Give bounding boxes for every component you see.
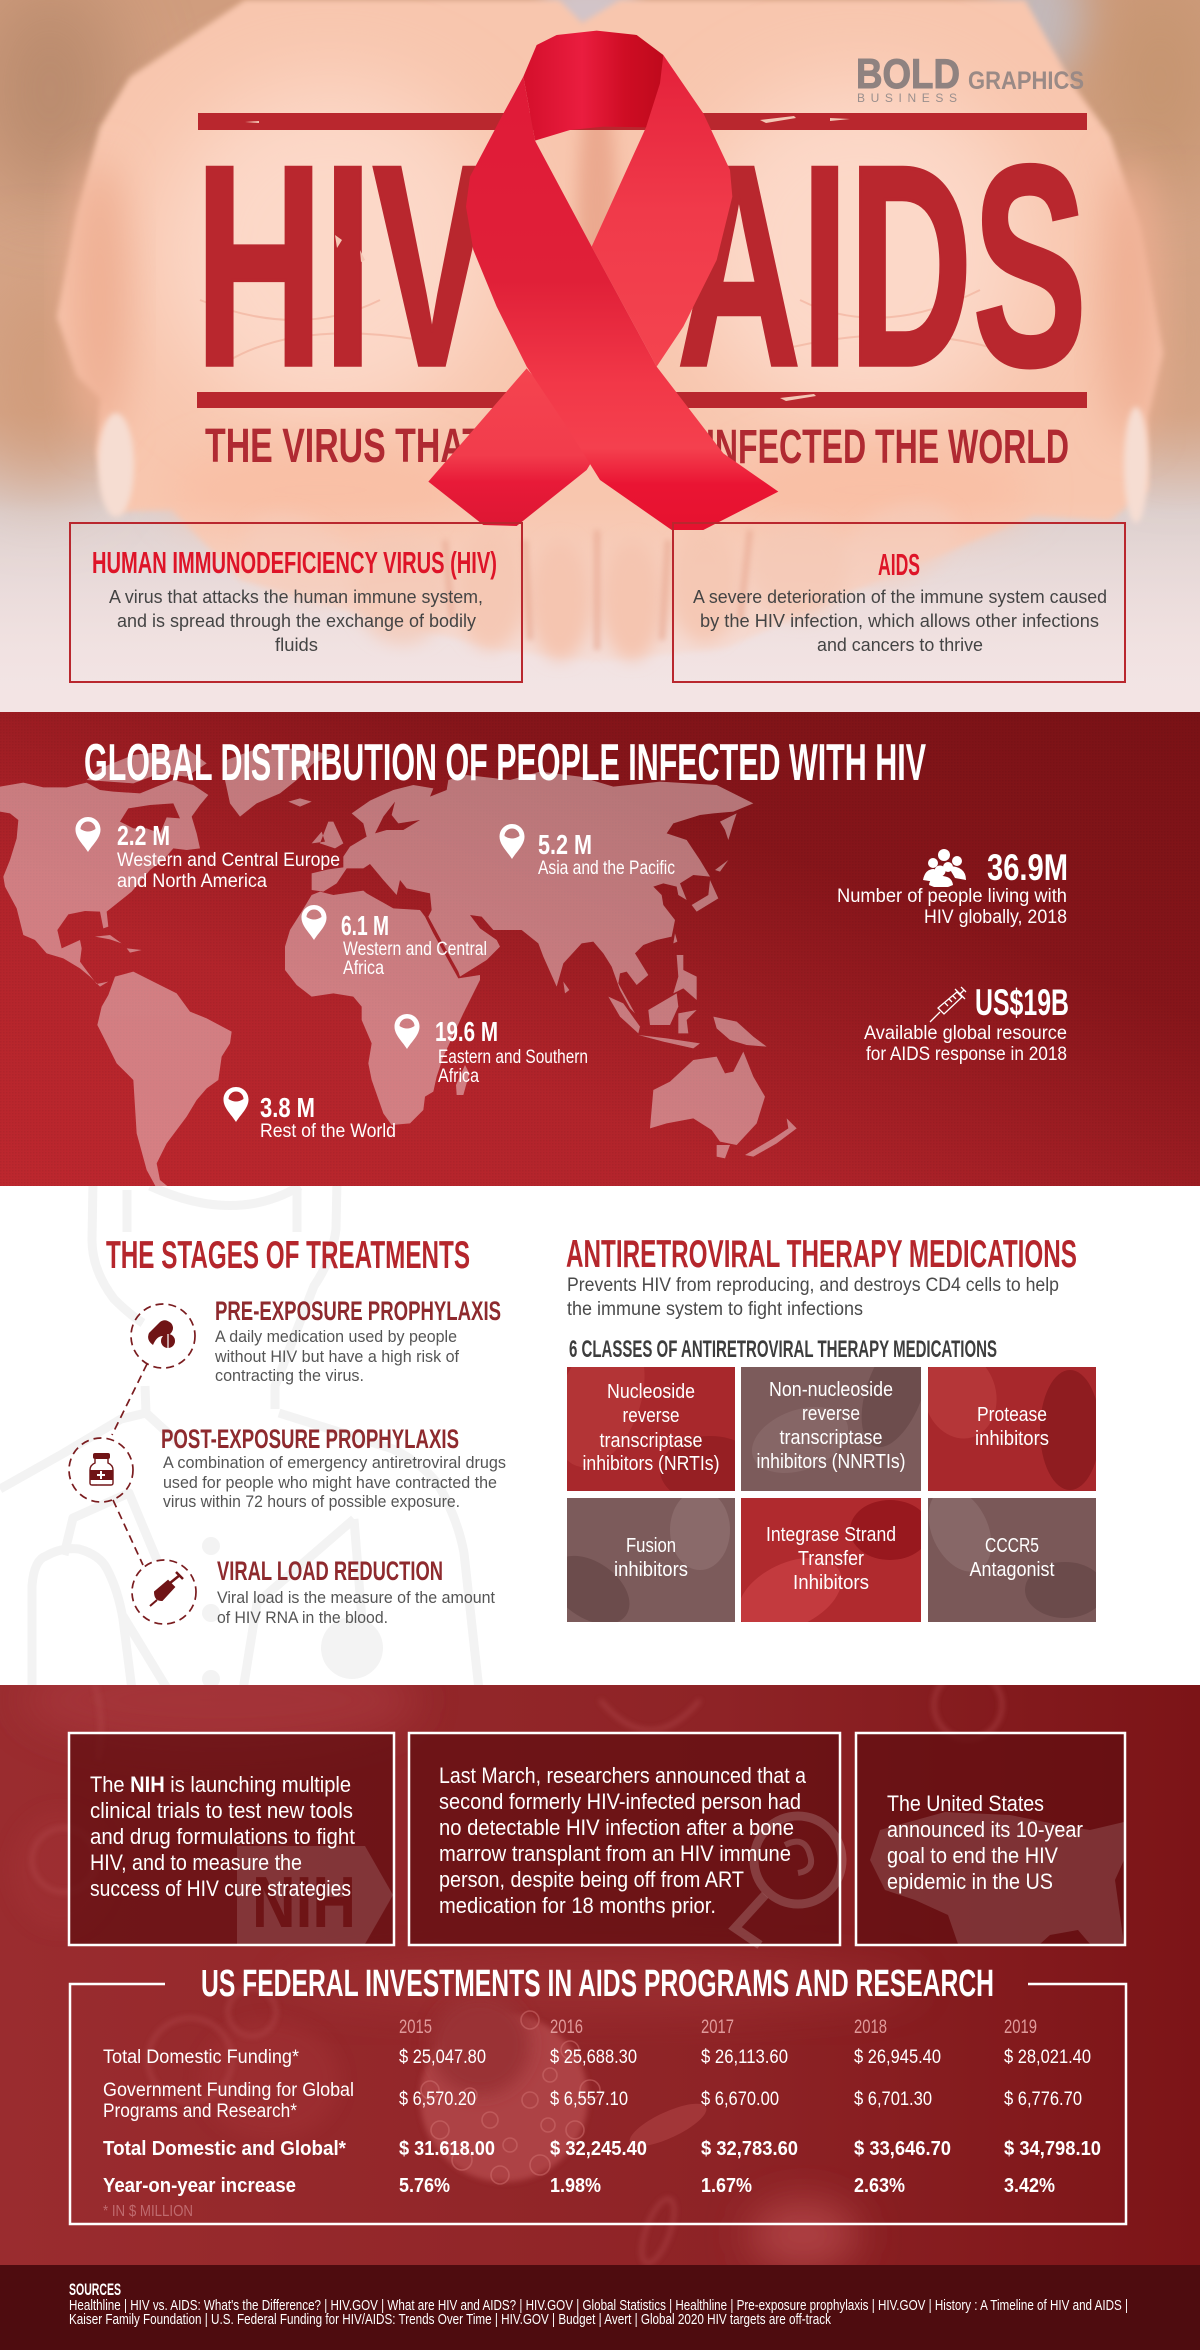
text: HIV definition body: and is spread through the exchange of bodily: [117, 610, 477, 631]
note: in $ million: * IN $ MILLION: [103, 2203, 193, 2220]
table row: year-on-year increase: 1.98%: [550, 2175, 601, 2197]
panel: sources: SOURCES: [69, 2280, 121, 2299]
panel: second HIV-free patient: [409, 1733, 842, 1945]
stage: viral load reduction: [217, 1556, 495, 1627]
text: US goal body: [887, 1791, 1083, 1894]
icon: syringe in dashed circle: [132, 1560, 196, 1624]
table row: total domestic and global: $ 34,798.10: [1004, 2138, 1101, 2160]
text: AIDS definition body: by the HIV infection, which allows other infections: [700, 610, 1099, 631]
callout: 3.8 M Rest of the World: 3.8 M: [260, 1092, 315, 1123]
title: HIV AIDS lettering with bars: [195, 105, 1087, 426]
callout: 5.2 M Asia and the Pacific: 5.2 M: [538, 829, 592, 860]
callout: 36.9M people living with HIV: Number of people living with: [837, 885, 1067, 907]
table row: total domestic and global: [103, 2138, 1101, 2160]
callout: US$19B global resource: Available global resource: [864, 1022, 1067, 1044]
callout: 2.2 M Western and Central Europe and North America: 2.2 M: [117, 820, 170, 851]
table row: total domestic funding: $ 26,945.40: [854, 2047, 941, 2068]
stage: viral load reduction: VIRAL LOAD REDUCTION: [217, 1556, 443, 1586]
tile: NNRTIs: transcriptase: [780, 1427, 882, 1449]
text: NIH body: and drug formulations to fight: [90, 1824, 355, 1849]
icon: pills in dashed circle: [131, 1304, 195, 1368]
icon: group of people: [923, 849, 966, 887]
text: US goal body: epidemic in the US: [887, 1869, 1053, 1894]
table row: total domestic and global: $ 31.618.00: [399, 2138, 495, 2160]
tile: CCCR5 antagonist: [928, 1498, 1096, 1622]
table: federal funding: [103, 2017, 1101, 2220]
callout: 2.2 M Western and Central Europe and North America: [76, 817, 340, 892]
text: US goal body: announced its 10-year: [887, 1817, 1083, 1842]
callout: 6.1 M Western and Central Africa: 6.1 M: [341, 910, 389, 941]
panel: NIH clinical trials: [69, 1733, 394, 1945]
heading: the stages of treatments: THE STAGES OF TREATMENTS: [106, 1234, 470, 1277]
stage: pre-exposure prophylaxis: [214, 1296, 501, 1385]
logo: Bold Business Graphics: GRAPHICS: [968, 67, 1084, 95]
table row: year-on-year increase: 1.67%: [701, 2175, 752, 2197]
callout: 19.6 M Eastern and Southern Africa: 19.6 M: [435, 1016, 498, 1047]
text: NIH body: [90, 1772, 355, 1901]
table row: year-on-year increase: 3.42%: [1004, 2175, 1055, 2197]
table row: total domestic and global: $ 33,646.70: [854, 2138, 951, 2160]
title: HIV AIDS lettering with bars: HIV: [195, 105, 492, 426]
table row: total domestic and global: $ 32,245.40: [550, 2138, 647, 2160]
callout: 19.6 M Eastern and Southern Africa: Africa: [438, 1066, 479, 1087]
subtitle: The virus that infected the world: THE VIRUS THAT: [205, 420, 483, 473]
heading: AIDS: AIDS: [878, 547, 920, 582]
text: AIDS definition body: A severe deterioration of the immune system caused: [693, 586, 1107, 607]
text: research body: person, despite being off from ART: [439, 1867, 744, 1892]
callout: 6.1 M Western and Central Africa: Western and Central: [343, 939, 487, 960]
panel: sources: Kaiser Family Foundation | U.S. Federal Funding for HIV/AIDS: Trends Over Time | HIV.GOV | Budget | Avert | Global 2020 HIV targets are off-track: [69, 2311, 831, 2328]
table row: government funding for global programs: $ 6,701.30: [854, 2089, 932, 2110]
text: research body: marrow transplant from an HIV immune: [439, 1841, 791, 1866]
table header: years: 2015: [399, 2017, 432, 2038]
table row: year-on-year increase: Year-on-year increase: [103, 2175, 296, 2197]
table header: years: [399, 2017, 1037, 2038]
tile: Fusion inhibitors: Fusion: [626, 1535, 676, 1557]
tile: Protease inhibitors: [928, 1367, 1096, 1491]
table header: years: 2017: [701, 2017, 734, 2038]
text: research body: [439, 1763, 807, 1918]
stage: pre-exposure prophylaxis: A daily medication used by people: [215, 1327, 457, 1346]
panel: global distribution background: [0, 712, 1200, 1186]
text: AIDS definition body: [693, 586, 1107, 655]
table header: years: 2016: [550, 2017, 583, 2038]
table row: total domestic funding: $ 28,021.40: [1004, 2047, 1091, 2068]
illustration: virus particle: [420, 1995, 600, 2184]
heading: Human Immunodeficiency Virus: HUMAN IMMUNODEFICIENCY VIRUS (HIV): [92, 545, 497, 580]
tile: CCCR5 antagonist: CCCR5: [985, 1535, 1039, 1557]
callout: 5.2 M Asia and the Pacific: Asia and the Pacific: [538, 858, 675, 879]
callout: 36.9M people living with HIV: HIV globally, 2018: [924, 906, 1067, 928]
tile: NRTIs: reverse: [622, 1405, 680, 1427]
stage: post-exposure prophylaxis: POST-EXPOSURE PROPHYLAXIS: [161, 1424, 459, 1454]
table row: total domestic funding: Total Domestic Funding*: [103, 2047, 300, 2068]
table header: years: 2019: [1004, 2017, 1037, 2038]
tile: NRTIs: Nucleoside: [607, 1381, 695, 1403]
stage: post-exposure prophylaxis: [161, 1424, 506, 1511]
stage: viral load reduction: of HIV RNA in the blood.: [217, 1608, 388, 1627]
panel: research background with blood cells and virus: [0, 1650, 1200, 2270]
text: HIV definition body: A virus that attacks the human immune system,: [109, 586, 483, 607]
tile: Integrase strand transfer inhibitors: Integrase Strand: [766, 1524, 896, 1546]
stage: pre-exposure prophylaxis: PRE-EXPOSURE PROPHYLAXIS: [215, 1296, 501, 1326]
text: antiretroviral therapy description: [567, 1275, 1059, 1320]
table row: total domestic funding: $ 25,047.80: [399, 2047, 486, 2068]
text: NIH body: success of HIV cure strategies: [90, 1876, 351, 1901]
stage: pre-exposure prophylaxis: without HIV but have a high risk of: [214, 1347, 459, 1366]
table row: total domestic funding: $ 25,688.30: [550, 2047, 637, 2068]
logo: Bold Business Graphics: BUSINESS: [857, 91, 957, 105]
tile: Fusion inhibitors: [567, 1498, 735, 1622]
tile: NNRTIs: inhibitors (NNRTIs): [756, 1451, 906, 1473]
callout: US$19B global resource: [864, 982, 1069, 1065]
callout: US$19B global resource: for AIDS response in 2018: [866, 1043, 1067, 1065]
table row: total domestic funding: $ 26,113.60: [701, 2047, 788, 2068]
tile: NRTIs: transcriptase: [600, 1430, 702, 1452]
text: US goal body: The United States: [887, 1791, 1044, 1816]
tile: NNRTIs: reverse: [802, 1403, 860, 1425]
table row: government funding for global programs: [103, 2080, 1082, 2122]
tile: Protease inhibitors: inhibitors: [975, 1428, 1049, 1450]
panel: treatments background with faint doctor illustration: [0, 1186, 483, 1685]
stage: viral load reduction: Viral load is the measure of the amount: [217, 1588, 495, 1607]
tile: Fusion inhibitors: inhibitors: [614, 1559, 688, 1581]
callout: 2.2 M Western and Central Europe and North America: Western and Central Europe: [117, 850, 340, 871]
tile: Protease inhibitors: Protease: [977, 1404, 1047, 1426]
table row: year-on-year increase: [103, 2175, 1055, 2197]
panel: frame for federal investments: [70, 1984, 1126, 2224]
callout: 3.8 M Rest of the World: [224, 1087, 396, 1142]
table row: total domestic funding: [103, 2047, 1091, 2068]
callout: 5.2 M Asia and the Pacific: [500, 824, 675, 879]
text: antiretroviral therapy description: the immune system to fight infections: [567, 1299, 863, 1320]
text: AIDS definition body: and cancers to thrive: [817, 634, 983, 655]
table header: years: 2018: [854, 2017, 887, 2038]
table row: year-on-year increase: 2.63%: [854, 2175, 905, 2197]
stage: post-exposure prophylaxis: used for people who might have contracted the: [163, 1473, 497, 1492]
callout: 36.9M people living with HIV: [837, 847, 1068, 928]
tile: CCCR5 antagonist: Antagonist: [970, 1559, 1055, 1581]
callout: 19.6 M Eastern and Southern Africa: [394, 1014, 588, 1087]
panel: HIV definition: [70, 523, 522, 682]
logo: Bold Business Graphics: BOLD: [856, 50, 960, 97]
table row: government funding for global programs: $ 6,557.10: [550, 2089, 628, 2110]
callout: 6.1 M Western and Central Africa: Africa: [343, 958, 384, 979]
text: HIV definition body: fluids: [275, 634, 318, 655]
icon: medicine bottle in dashed circle: [69, 1438, 133, 1502]
logo: NIH ghost: [237, 1846, 393, 1944]
callout: 36.9M people living with HIV: 36.9M: [987, 847, 1068, 888]
icon: red awareness ribbon: [428, 31, 778, 530]
panel: sources: [0, 2265, 1200, 2350]
text: antiretroviral therapy description: Prevents HIV from reproducing, and destroys CD4 cells to help: [567, 1275, 1059, 1296]
tile: NNRTIs: Non-nucleoside: [769, 1379, 893, 1401]
tile: Integrase strand transfer inhibitors: Inhibitors: [793, 1572, 869, 1594]
icon: syringe outline: [930, 987, 966, 1022]
callout: 19.6 M Eastern and Southern Africa: Eastern and Southern: [438, 1047, 588, 1068]
stage: pre-exposure prophylaxis: contracting the virus.: [215, 1366, 364, 1385]
callout: 6.1 M Western and Central Africa: [302, 905, 487, 979]
logo: Bold Business Graphics: [856, 50, 1084, 105]
icon: magnifier ghost: [735, 1816, 842, 1945]
callout: 2.2 M Western and Central Europe and North America: and North America: [117, 871, 267, 892]
table row: total domestic and global: Total Domestic and Global*: [103, 2138, 346, 2160]
text: research body: medication for 18 months prior.: [439, 1893, 716, 1918]
table row: government funding for global programs: Programs and Research*: [103, 2101, 298, 2122]
table row: government funding for global programs: $ 6,776.70: [1004, 2089, 1082, 2110]
text: NIH body: clinical trials to test new tools: [90, 1798, 353, 1823]
subtitle: The virus that infected the world: [205, 420, 1069, 474]
chart: world map: [0, 748, 797, 1188]
table row: total domestic and global: $ 32,783.60: [701, 2138, 798, 2160]
table row: government funding for global programs: $ 6,570.20: [399, 2089, 476, 2110]
text: NIH body: HIV, and to measure the: [90, 1850, 302, 1875]
stage: post-exposure prophylaxis: A combination of emergency antiretroviral drugs: [163, 1453, 506, 1472]
panel: AIDS definition: [673, 523, 1125, 682]
text: research body: Last March, researchers announced that a: [439, 1763, 807, 1788]
stage: post-exposure prophylaxis: virus within 72 hours of possible exposure.: [163, 1492, 460, 1511]
panel: United States 10-year goal: [856, 1733, 1125, 1945]
logo: NIH ghost: NIH: [252, 1863, 356, 1943]
tile: NRTIs: inhibitors (NRTIs): [582, 1453, 720, 1475]
timeline: dashed connectors: [112, 1364, 147, 1565]
text: NIH body: The NIH is launching multiple: [90, 1772, 351, 1797]
photo: cupped hands background: [0, 0, 1200, 712]
text: research body: second formerly HIV-infected person had: [439, 1789, 801, 1814]
table row: government funding for global programs: $ 6,670.00: [701, 2089, 779, 2110]
callout: US$19B global resource: US$19B: [975, 982, 1069, 1023]
table row: year-on-year increase: 5.76%: [399, 2175, 450, 2197]
map: USA ghost: [870, 1812, 1124, 1944]
callout: 3.8 M Rest of the World: Rest of the World: [260, 1121, 396, 1142]
text: US goal body: goal to end the HIV: [887, 1843, 1058, 1868]
table row: government funding for global programs: Government Funding for Global: [103, 2080, 354, 2101]
text: HIV definition body: [109, 586, 483, 655]
tile: Integrase strand transfer inhibitors: [741, 1498, 921, 1622]
tile: NNRTIs: [741, 1367, 921, 1491]
tile: Integrase strand transfer inhibitors: Transfer: [798, 1548, 864, 1570]
text: research body: no detectable HIV infection after a bone: [439, 1815, 794, 1840]
tile: NRTIs: [567, 1367, 735, 1491]
